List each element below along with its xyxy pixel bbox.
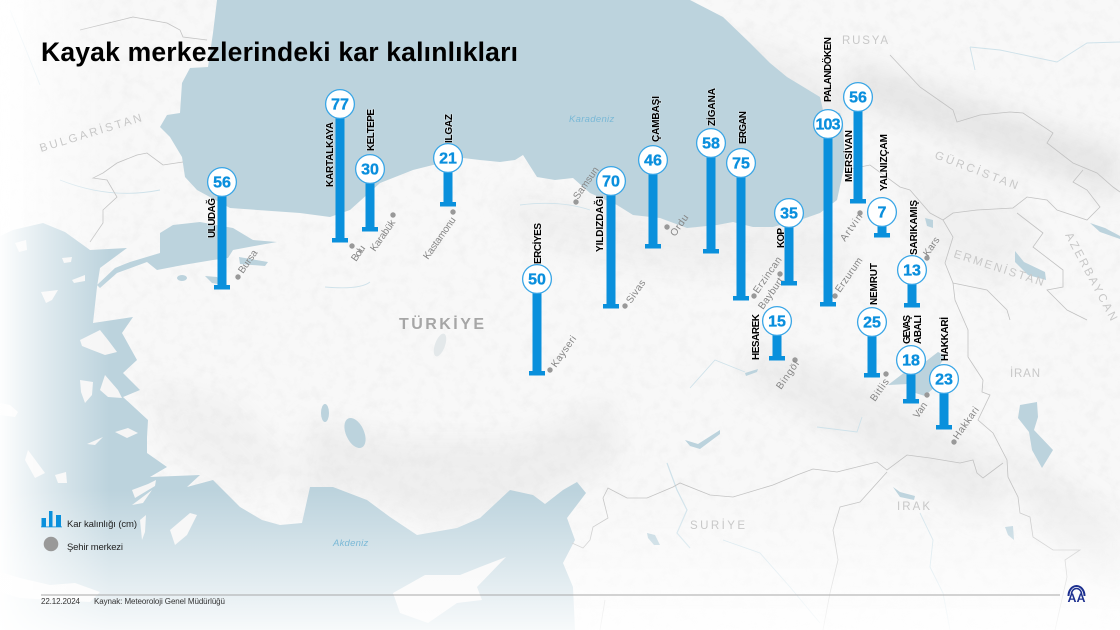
footer rule [41, 594, 1060, 596]
city: Bursa: Bursa [236, 248, 261, 276]
icon: AA logo: AA [1068, 591, 1086, 605]
marker: Gevaş Abalı 18: GEVAŞ [902, 315, 913, 344]
country label: İran: İRAN [1010, 367, 1042, 380]
marker: Zigana 58: ZİGANA [705, 88, 718, 126]
marker: Kop 35: 35 [780, 206, 798, 222]
marker: Hesarek 15: HESAREK [751, 313, 762, 360]
marker: Ilgaz 21 [434, 114, 462, 206]
city: Kastamonu: Kastamonu [421, 215, 459, 262]
marker: Çambaşı 46: ÇAMBAŞI [651, 96, 662, 142]
city: Karabük: Karabük [368, 217, 399, 254]
city: Erzincan: Erzincan [751, 255, 785, 296]
marker: Ilgaz 21: 21 [439, 150, 457, 168]
marker: Yalnızçam 7: YALNIZÇAM [879, 134, 890, 191]
city: Erzurum: Erzurum [833, 256, 865, 295]
city: Kars: Kars [921, 235, 943, 259]
marker: Keltepe 30: KELTEPE [366, 109, 377, 151]
marker: Yıldızdağı 70: 70 [602, 174, 620, 190]
marker: Palandöken 103: 103 [816, 116, 841, 134]
city: Ordu: Ordu [668, 213, 691, 239]
marker: Kartalkaya 77: 77 [331, 96, 349, 114]
country label: Rusya: RUSYA [842, 35, 890, 47]
marker: Kartalkaya 77: KARTALKAYA [325, 122, 336, 187]
country label: Gürcistan: GÜRCİSTAN [933, 149, 1022, 193]
marker: Ergan 75: 75 [732, 156, 750, 172]
city: Bingöl: Bingöl [774, 359, 802, 392]
country label: Türkiye: TÜRKİYE [399, 314, 484, 333]
map: Aegean and Mediterranean seas [0, 223, 586, 630]
marker: Erciyes 50 [523, 223, 551, 376]
marker: Çambaşı 46 [639, 96, 667, 248]
marker: Gevaş Abalı 18: 18 [902, 352, 920, 370]
city: Bolu: Bolu [349, 243, 368, 264]
marker: Palandöken 103: PALANDÖKEN [821, 37, 834, 102]
legend text: snow depth: Kar kalınlığı (cm) [67, 519, 137, 530]
map: lakes [177, 218, 1120, 545]
city: Sivas: Sivas [624, 278, 648, 306]
legend text: city centre: Şehir merkezi [67, 542, 123, 553]
title: Kayak merkezlerindeki kar kalınlıkları [41, 37, 518, 67]
icon: AA logo [1068, 586, 1086, 605]
marker: Sarıkamış 13: 13 [903, 262, 921, 280]
marker: Hakkari 23: 23 [935, 372, 953, 388]
marker: Mersivan 56: 56 [849, 90, 867, 106]
marker: Hesarek 15: 15 [768, 314, 786, 330]
city: Hakkari: Hakkari [951, 405, 982, 442]
sea label: Akdeniz: Akdeniz [332, 538, 369, 549]
marker: Yıldızdağı 70: YILDIZDAĞI [593, 196, 606, 252]
marker: Uludağ 56: 56 [213, 174, 231, 192]
marker: Uludağ 56 [205, 168, 236, 290]
city: Artvin: Artvin [838, 212, 865, 244]
map: islands [0, 240, 506, 623]
marker: Hakkari 23 [930, 317, 958, 430]
marker: Gevaş Abalı 18: ABALI [913, 315, 924, 344]
marker: Erciyes 50: ERCİYES [531, 223, 544, 264]
country label: Bulgaristan: BULGARİSTAN [38, 111, 145, 155]
marker: Keltepe 30: 30 [361, 162, 379, 178]
marker: Nemrut 25: NEMRUT [869, 263, 880, 305]
city: Van: Van [911, 400, 930, 421]
map: Sea of Marmara [97, 222, 277, 288]
city: Kayseri: Kayseri [549, 334, 579, 370]
country label: Suriye: SURİYE [690, 519, 747, 532]
marker: Mersivan 56 [842, 83, 872, 204]
marker: Erciyes 50: 50 [528, 272, 546, 288]
city: Samsun: Samsun [571, 165, 602, 202]
marker: Yalnızçam 7: 7 [878, 204, 887, 222]
marker: Palandöken 103 [814, 37, 842, 306]
marker: Yıldızdağı 70 [593, 167, 625, 308]
marker: Zigana 58 [697, 88, 725, 254]
marker: Çambaşı 46: 46 [644, 152, 662, 170]
marker: Sarıkamış 13: SARIKAMIŞ [909, 200, 920, 255]
sea label: Karadeniz: Karadeniz [569, 114, 615, 125]
country label: Ermenistan: ERMENİSTAN [952, 247, 1047, 290]
city: Bitlis: Bitlis [868, 377, 892, 404]
icon: snow depth bars [41, 511, 62, 527]
marker: Zigana 58: 58 [702, 136, 720, 152]
marker: Gevaş Abalı 18 [897, 315, 925, 404]
marker: Ergan 75: ERGAN [738, 111, 749, 144]
marker: Keltepe 30 [356, 109, 384, 232]
map: Black Sea [160, 0, 845, 228]
marker: Uludağ 56: ULUDAĞ [205, 198, 218, 238]
marker: Kartalkaya 77 [325, 90, 354, 242]
marker: Ergan 75 [727, 111, 755, 300]
legend [41, 511, 137, 553]
footer source: Kaynak: Meteoroloji Genel Müdürlüğü [94, 597, 225, 606]
country label: Irak: IRAK [897, 501, 932, 513]
marker: Sarıkamış 13 [898, 200, 926, 308]
city: Bayburt: Bayburt [756, 276, 786, 312]
marker: Hesarek 15 [751, 307, 791, 360]
icon: city centre [44, 537, 58, 551]
country label: Azerbaycan: AZERBAYCAN [1062, 231, 1120, 325]
marker: Hakkari 23: HAKKARİ [938, 317, 951, 361]
footer date: 22.12.2024 [41, 597, 81, 606]
marker: Yalnızçam 7 [868, 134, 896, 238]
marker: Ilgaz 21: ILGAZ [444, 114, 455, 143]
marker: Kop 35: KOP [776, 228, 787, 248]
marker: Nemrut 25 [858, 263, 886, 378]
marker: Mersivan 56: MERSİVAN [842, 130, 855, 182]
marker: Kop 35 [775, 199, 803, 286]
marker: Nemrut 25: 25 [863, 314, 881, 332]
